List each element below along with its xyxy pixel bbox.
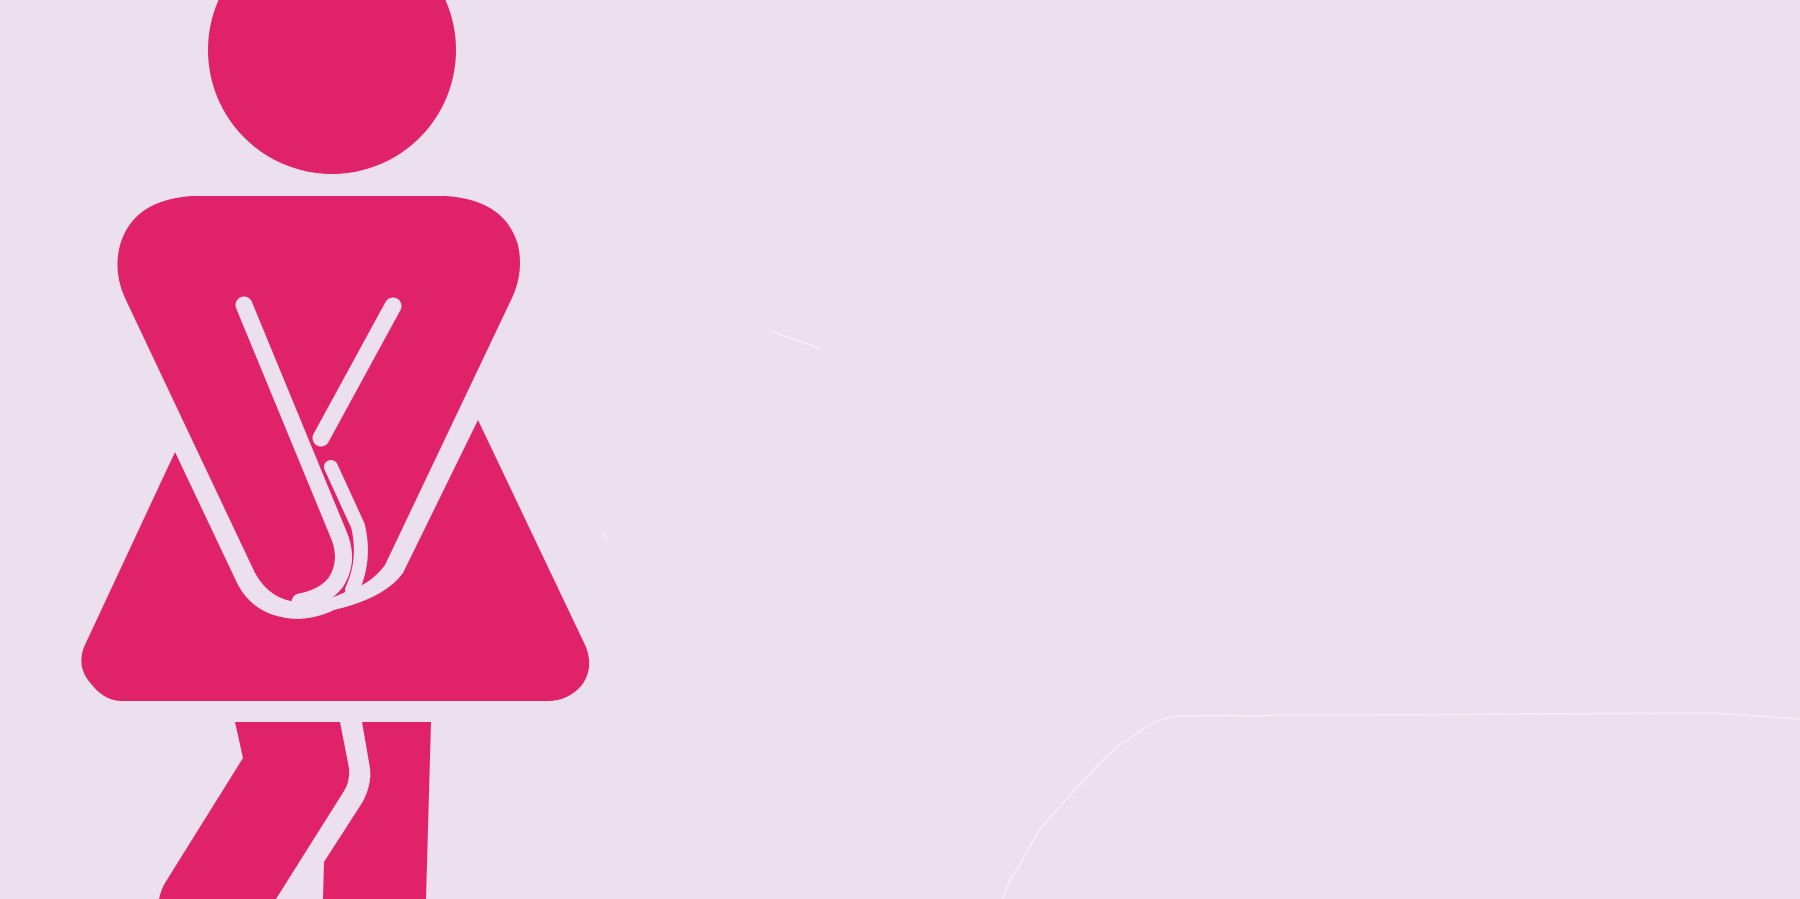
skirt [81,420,589,701]
right leg [323,722,431,899]
head [208,0,456,174]
torso with hands [117,196,520,602]
arms: background-coloured gaps [244,305,393,602]
faint decorative lines [602,331,1800,899]
figure [81,0,589,899]
left leg [159,722,349,899]
